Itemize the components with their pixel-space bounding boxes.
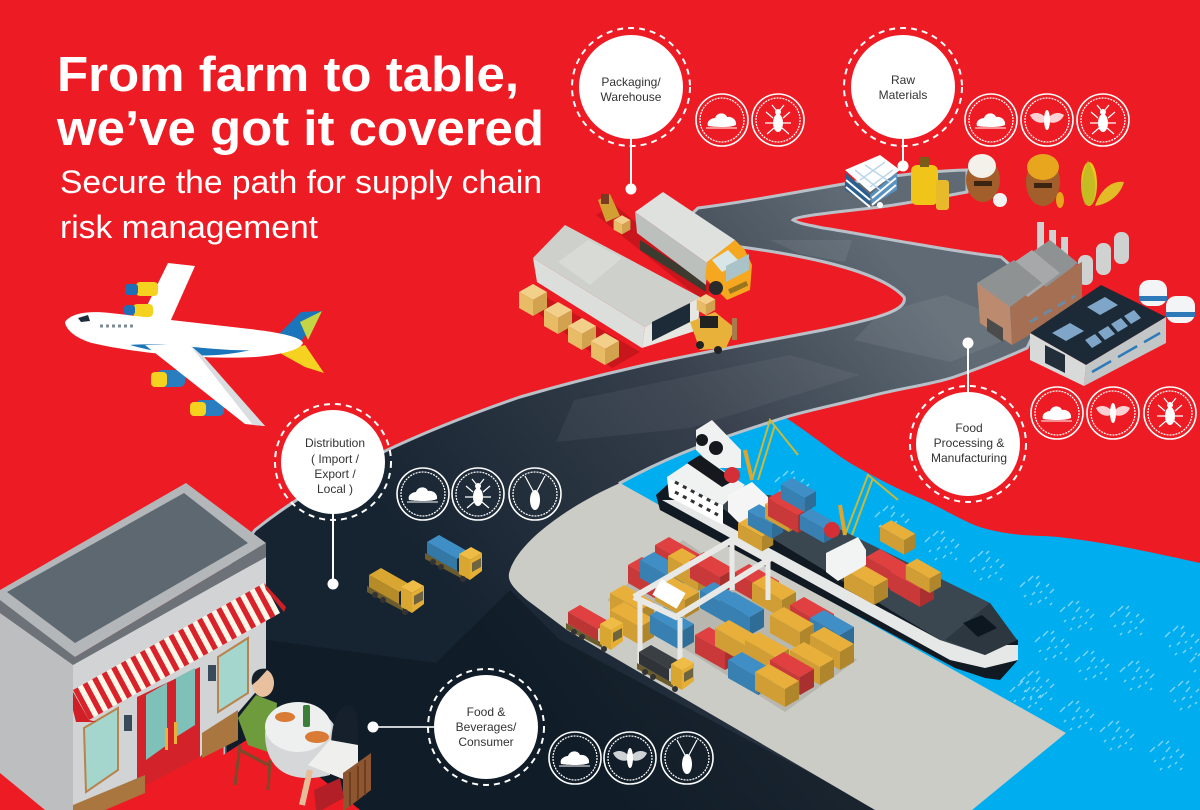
stage: food processing bbox=[910, 338, 1196, 502]
silos bbox=[1037, 222, 1129, 285]
corn bbox=[1081, 160, 1124, 206]
stage: distribution: Distribution bbox=[305, 436, 365, 450]
stage: food processing: Processing & bbox=[934, 436, 1004, 450]
risk icons bbox=[549, 732, 713, 784]
drums bbox=[1139, 280, 1195, 323]
striped awning bbox=[73, 583, 286, 722]
bottle pallet bbox=[845, 155, 900, 208]
grain sack bbox=[1026, 154, 1064, 208]
table bbox=[265, 702, 334, 778]
title: we’ve got it covered bbox=[56, 102, 544, 156]
flour sack bbox=[966, 154, 1007, 207]
man bbox=[235, 669, 277, 790]
factory complex bbox=[977, 222, 1195, 386]
bubble bbox=[434, 675, 538, 779]
bubble bbox=[281, 410, 385, 514]
container ship bbox=[656, 420, 1018, 680]
chair bbox=[314, 753, 371, 810]
forklift: lower bbox=[690, 294, 737, 354]
stage: packaging bbox=[572, 28, 804, 194]
stage: packaging: Packaging/ bbox=[601, 75, 661, 89]
stage: food and beverages: Food & bbox=[467, 705, 505, 719]
stage: food and beverages bbox=[368, 669, 713, 785]
raw materials bbox=[845, 154, 1124, 210]
diners at table bbox=[235, 669, 371, 810]
brick factory bbox=[977, 240, 1082, 345]
stage: raw materials bbox=[844, 28, 1129, 172]
gantry crane bbox=[634, 540, 768, 668]
pin bbox=[630, 139, 632, 189]
subtitle: Secure the path for supply chain bbox=[60, 164, 542, 200]
subtitle bbox=[60, 164, 542, 245]
trucks on quay bbox=[566, 605, 694, 692]
winding road bbox=[225, 170, 1050, 810]
large truck bbox=[635, 192, 752, 300]
roof bbox=[0, 483, 266, 665]
title bbox=[56, 48, 544, 156]
stage: raw materials: Materials bbox=[879, 88, 927, 102]
warehouse area bbox=[519, 192, 752, 368]
bubble bbox=[916, 392, 1020, 496]
risk icons bbox=[397, 468, 561, 520]
windows and door bbox=[73, 638, 248, 810]
ship containers bbox=[738, 478, 941, 607]
bridge superstructure bbox=[667, 420, 768, 526]
woman bbox=[302, 705, 358, 805]
cranes bbox=[745, 420, 898, 535]
quay bbox=[509, 483, 1066, 810]
risk icons bbox=[1031, 387, 1196, 439]
stage: food processing: Food bbox=[955, 421, 983, 435]
forklift: upper bbox=[598, 194, 630, 234]
stage: distribution bbox=[275, 404, 561, 590]
warehouse building bbox=[533, 225, 700, 348]
trucks on road bbox=[367, 535, 482, 615]
bubble bbox=[851, 35, 955, 139]
stage: distribution: Local ) bbox=[317, 482, 353, 496]
cardboard boxes bbox=[519, 284, 619, 365]
risk icons bbox=[965, 94, 1129, 146]
stage: raw materials: Raw bbox=[891, 73, 915, 87]
water bbox=[600, 418, 1200, 810]
modern plant bbox=[1030, 285, 1166, 386]
stage: food processing: Manufacturing bbox=[931, 451, 1007, 465]
stage: food and beverages: Beverages/ bbox=[456, 720, 517, 734]
bubble bbox=[579, 35, 683, 139]
restaurant bbox=[0, 483, 360, 810]
subtitle: risk management bbox=[60, 209, 318, 245]
stage: food and beverages: Consumer bbox=[458, 735, 514, 749]
water ripples bbox=[775, 471, 1200, 770]
container yard bbox=[607, 537, 857, 712]
oil bottles bbox=[911, 157, 949, 210]
road shading bbox=[225, 240, 1030, 810]
title: From farm to table, bbox=[57, 48, 519, 102]
stage: distribution: Export / bbox=[314, 467, 356, 481]
risk icons bbox=[696, 94, 804, 146]
stage: distribution: ( Import / bbox=[311, 452, 360, 466]
stage: packaging: Warehouse bbox=[601, 90, 662, 104]
airplane bbox=[65, 263, 324, 426]
